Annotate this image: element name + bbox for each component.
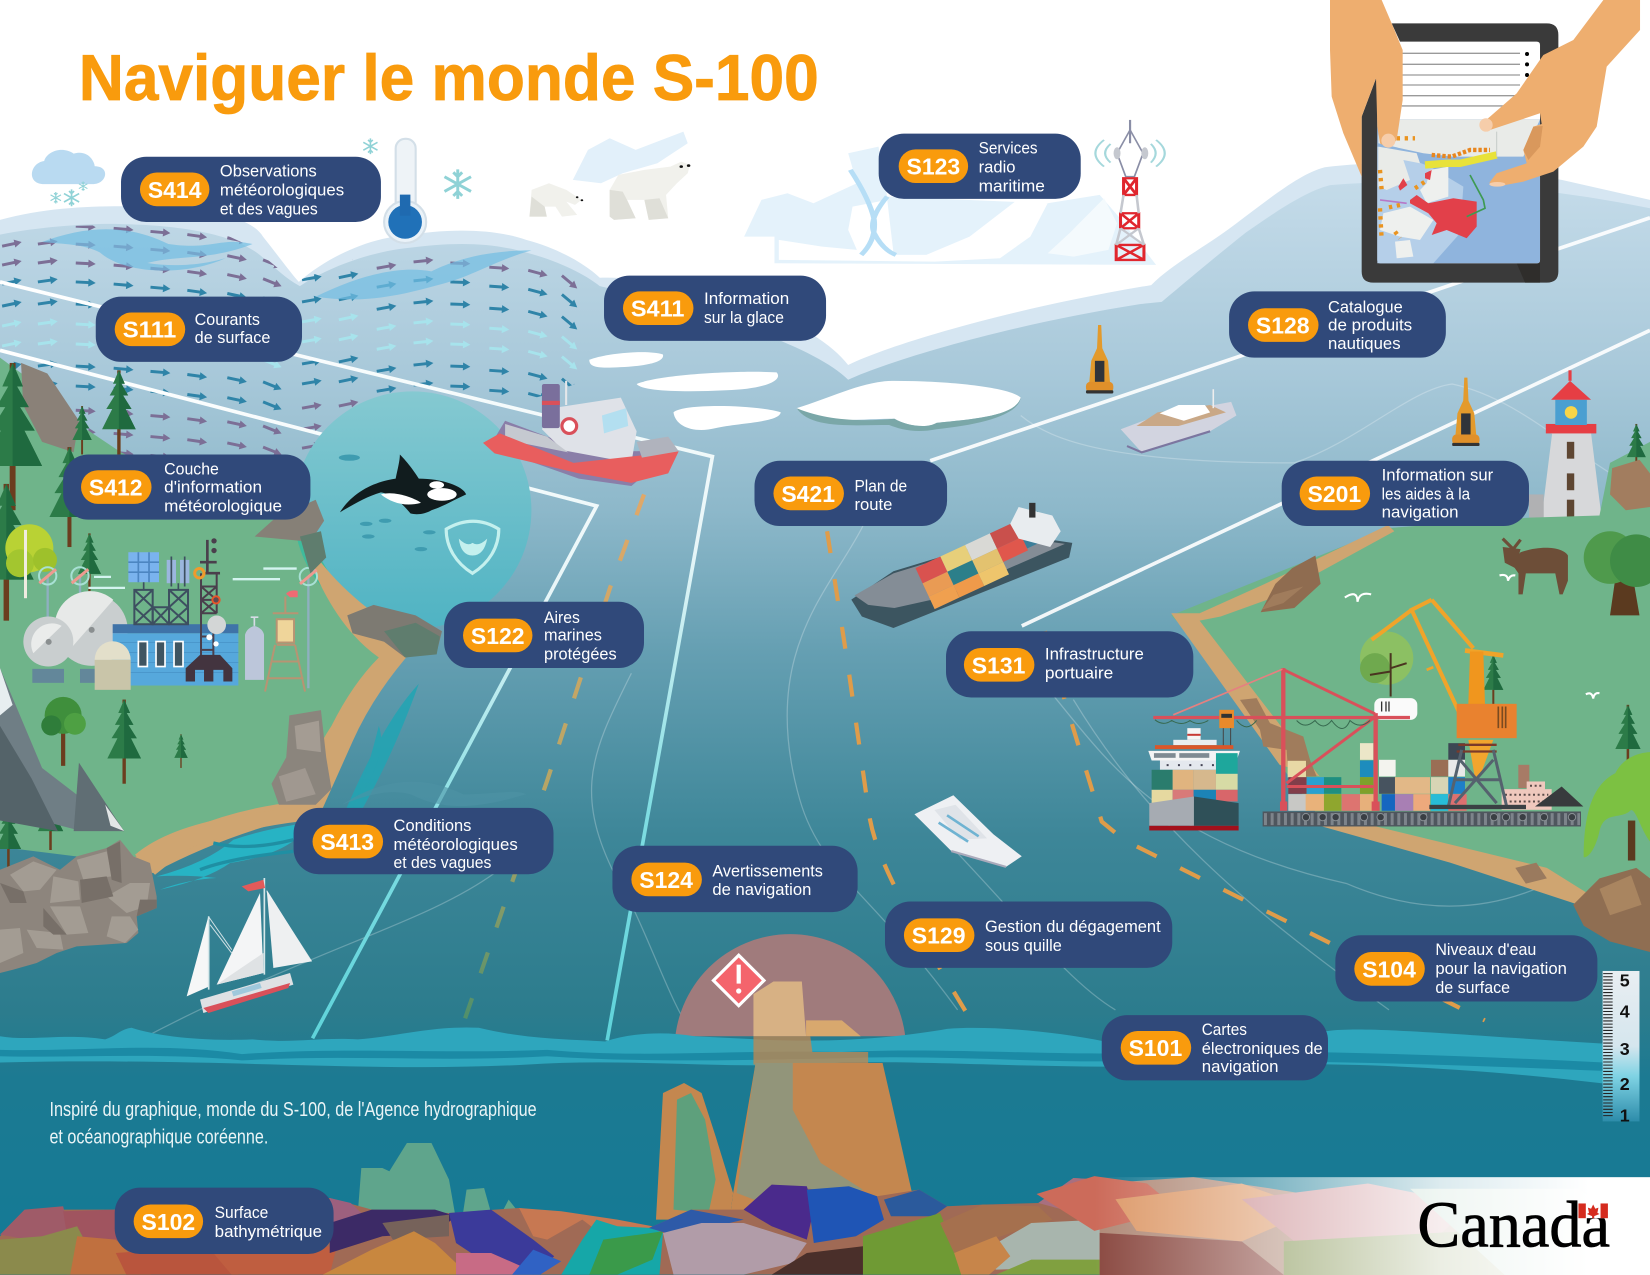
solar panel and frames xyxy=(128,552,189,624)
map xyxy=(1377,119,1540,263)
label: S201: S201 xyxy=(1307,481,1361,507)
credit text: et océanographique coréenne. xyxy=(49,1127,268,1149)
sand xyxy=(135,806,300,875)
label: S128: Catalogue xyxy=(1328,297,1403,316)
label: S411: S411 xyxy=(631,296,685,322)
label: S131 xyxy=(946,631,1193,697)
right finger nails xyxy=(1479,118,1505,187)
right hand xyxy=(1480,0,1640,187)
factory xyxy=(1502,765,1583,810)
label: S412 xyxy=(63,454,310,520)
land rocks behind trees xyxy=(21,363,79,452)
birch tree xyxy=(5,524,57,598)
currents near shore xyxy=(337,684,419,842)
cloud with snow xyxy=(32,150,105,206)
green stacks xyxy=(358,1143,519,1220)
label: S421: Plan de xyxy=(854,476,907,495)
yacht xyxy=(1121,389,1236,452)
pier xyxy=(1263,801,1581,826)
label: S122: protégées xyxy=(544,645,617,664)
label: S123: S123 xyxy=(907,154,960,180)
tablet with hands xyxy=(1330,0,1640,283)
label: S123 xyxy=(879,134,1081,199)
label: S412: météorologique xyxy=(164,496,282,515)
fade to white xyxy=(1094,1177,1650,1275)
small shore rocks right xyxy=(1515,863,1547,884)
label: S104: Niveaux d'eau xyxy=(1435,940,1536,959)
water surface xyxy=(0,1028,1604,1084)
label: S122: S122 xyxy=(471,623,525,649)
water gauge: 4 xyxy=(1620,1001,1630,1021)
red gantry crane xyxy=(1153,668,1410,806)
pine far right xyxy=(1615,705,1641,768)
label: S111 xyxy=(96,297,302,362)
label: S411 xyxy=(604,276,826,341)
left boulder pile and shore waves xyxy=(0,806,312,1013)
label: S411: sur la glace xyxy=(704,308,784,327)
left finger nail xyxy=(1381,134,1395,148)
port xyxy=(1148,587,1583,830)
label: S201: Information sur xyxy=(1382,466,1494,485)
seabed right xyxy=(1037,1176,1650,1275)
label: S201: les aides à la xyxy=(1382,485,1471,504)
current arrows xyxy=(2,226,578,454)
containers xyxy=(1288,743,1467,811)
label: S102: Surface xyxy=(215,1203,268,1222)
label: S201 xyxy=(1282,461,1529,526)
label: S129 xyxy=(885,902,1172,968)
label: S413: S413 xyxy=(320,829,374,855)
label: S421 xyxy=(754,461,947,526)
label: S421: S421 xyxy=(781,481,835,507)
left sandy shore xyxy=(135,526,412,873)
label: S201: navigation xyxy=(1382,503,1458,522)
rock pillar above water xyxy=(753,981,861,1036)
label: S124: Avertissements xyxy=(712,861,823,880)
iceberg xyxy=(744,147,1156,265)
label: S129: sous quille xyxy=(985,936,1062,955)
label: S413: et des vagues xyxy=(394,853,491,872)
waves xyxy=(157,825,295,890)
credit text: Inspiré du graphique, monde du S-100, de l'Agence hydrographique xyxy=(49,1099,537,1121)
seabed and stacks xyxy=(0,1063,1100,1275)
top rock xyxy=(1262,587,1303,610)
warning diamond xyxy=(713,955,764,1006)
label: S413: Conditions xyxy=(394,816,471,835)
label: S102: S102 xyxy=(142,1209,195,1235)
label: S131: S131 xyxy=(972,652,1026,678)
sailboat xyxy=(187,878,312,1013)
cargo ship xyxy=(1148,728,1240,830)
snowflakes xyxy=(363,138,471,199)
label: S122: marines xyxy=(544,626,602,645)
label: S124 xyxy=(612,846,858,912)
fish xyxy=(339,454,436,551)
moose xyxy=(1503,539,1568,594)
label: S124: de navigation xyxy=(712,880,811,899)
right sandy shore xyxy=(1171,525,1589,905)
left hand xyxy=(1330,0,1403,177)
pillar seen through water xyxy=(753,1036,868,1065)
thermometer xyxy=(384,139,426,243)
label: S129: Gestion du dégagement xyxy=(985,917,1161,936)
tablet sheen xyxy=(1517,263,1540,283)
radio tower xyxy=(1095,120,1165,260)
label: S414: météorologiques xyxy=(220,181,344,200)
label: S414: S414 xyxy=(148,177,202,203)
anemometers xyxy=(39,567,317,688)
tree by lighthouse xyxy=(1627,424,1646,471)
current swirls xyxy=(42,229,531,299)
blue building xyxy=(113,624,238,686)
label: S111: de surface xyxy=(195,328,270,347)
label: S123: Services xyxy=(979,139,1038,158)
route lines right xyxy=(930,218,1650,626)
label: S128: S128 xyxy=(1256,312,1310,338)
right thumb shade xyxy=(1523,126,1543,160)
label: S124: S124 xyxy=(639,867,693,893)
tank xyxy=(245,617,264,680)
label: S104 xyxy=(1335,935,1597,1001)
base xyxy=(0,1178,1100,1275)
pine behind crane xyxy=(1483,655,1503,705)
right land xyxy=(1171,442,1650,936)
whale tail in shield xyxy=(459,539,487,555)
label: S414: Observations xyxy=(220,162,317,181)
label: S122: Aires xyxy=(544,608,580,627)
crane cabin xyxy=(1374,698,1417,720)
protected area shield xyxy=(446,521,499,573)
label: S131: portuaire xyxy=(1045,664,1113,683)
red ship xyxy=(483,381,679,486)
mountains xyxy=(0,668,124,831)
port rocks xyxy=(1240,698,1317,776)
Canada wordmark: Canada xyxy=(1417,1190,1610,1262)
tree in port xyxy=(1360,632,1413,696)
label: S421: route xyxy=(854,495,892,514)
label: S101: S101 xyxy=(1129,1035,1182,1061)
label: S414 xyxy=(121,157,381,222)
birds xyxy=(1345,575,1599,699)
label: S412: Couche xyxy=(164,459,219,478)
weather station xyxy=(23,538,317,692)
spreader xyxy=(1219,710,1234,746)
label: S123: maritime xyxy=(979,176,1045,195)
label: S123: radio xyxy=(979,158,1015,177)
orca xyxy=(340,454,466,514)
water gauge: 2 xyxy=(1620,1074,1630,1094)
label: S129: S129 xyxy=(912,923,965,949)
label: S101: navigation xyxy=(1202,1057,1279,1076)
water gauge: 3 xyxy=(1620,1039,1630,1059)
crane wires xyxy=(1155,720,1370,728)
label: S128: nautiques xyxy=(1328,334,1401,353)
orange stacks xyxy=(656,1063,912,1220)
marine protected area circle xyxy=(294,391,531,629)
label: S104: pour la navigation xyxy=(1435,959,1567,978)
wooden lookout xyxy=(265,590,305,692)
label: S104: de surface xyxy=(1435,978,1510,997)
label: S111: S111 xyxy=(123,317,176,343)
wave swirl xyxy=(342,782,526,806)
route lines left xyxy=(0,282,712,1040)
rocks xyxy=(0,840,157,973)
label: S413 xyxy=(294,808,554,874)
label: S414: et des vagues xyxy=(220,200,318,219)
contour lines xyxy=(137,384,1650,1041)
orange crane xyxy=(1372,600,1526,809)
left land xyxy=(0,358,406,874)
buoys xyxy=(1086,325,1480,446)
polar bears xyxy=(529,162,690,220)
label: S412: S412 xyxy=(89,474,143,500)
warning dome xyxy=(676,934,905,1036)
label: S102 xyxy=(115,1188,334,1254)
label: S411: Information xyxy=(704,289,789,308)
lighthouse xyxy=(1529,370,1602,518)
label: S131: Infrastructure xyxy=(1045,645,1144,664)
water gauge xyxy=(1603,971,1639,1125)
label: S101 xyxy=(1102,1015,1328,1080)
willow tree xyxy=(1584,752,1650,861)
shore boulders xyxy=(271,710,331,805)
satellite dishes xyxy=(23,591,128,683)
ice floes xyxy=(589,352,1021,431)
screen xyxy=(1377,42,1540,263)
rocks right xyxy=(1261,460,1650,612)
protected zone over land xyxy=(298,540,328,586)
label: S101: électroniques de xyxy=(1202,1039,1323,1058)
tablet body xyxy=(1362,23,1558,283)
label: S102: bathymétrique xyxy=(215,1222,322,1241)
label: S111: Courants xyxy=(195,310,260,329)
label: S122 xyxy=(444,602,644,668)
container ship xyxy=(851,503,1072,628)
water gauge: 1 xyxy=(1620,1105,1630,1125)
trees left xyxy=(0,363,188,868)
big rock right xyxy=(1573,868,1650,952)
label: S104: S104 xyxy=(1362,956,1416,982)
label: S128: de produits xyxy=(1328,315,1412,334)
title: Naviguer le monde S-100 xyxy=(79,41,819,114)
oak tree xyxy=(1584,531,1650,615)
label: S412: d'information xyxy=(164,477,262,496)
label: S101: Cartes xyxy=(1202,1020,1247,1039)
water gauge: 5 xyxy=(1620,971,1630,991)
credit text xyxy=(49,1099,537,1149)
label: S128 xyxy=(1229,291,1446,358)
cruise ship xyxy=(914,795,1022,867)
label: S413: météorologiques xyxy=(394,835,518,854)
observatory dome xyxy=(95,641,131,690)
ice behind bears xyxy=(573,132,688,183)
rocks by protected area xyxy=(255,500,442,657)
dashed route lines xyxy=(465,494,1485,1020)
communication mast xyxy=(186,538,232,682)
